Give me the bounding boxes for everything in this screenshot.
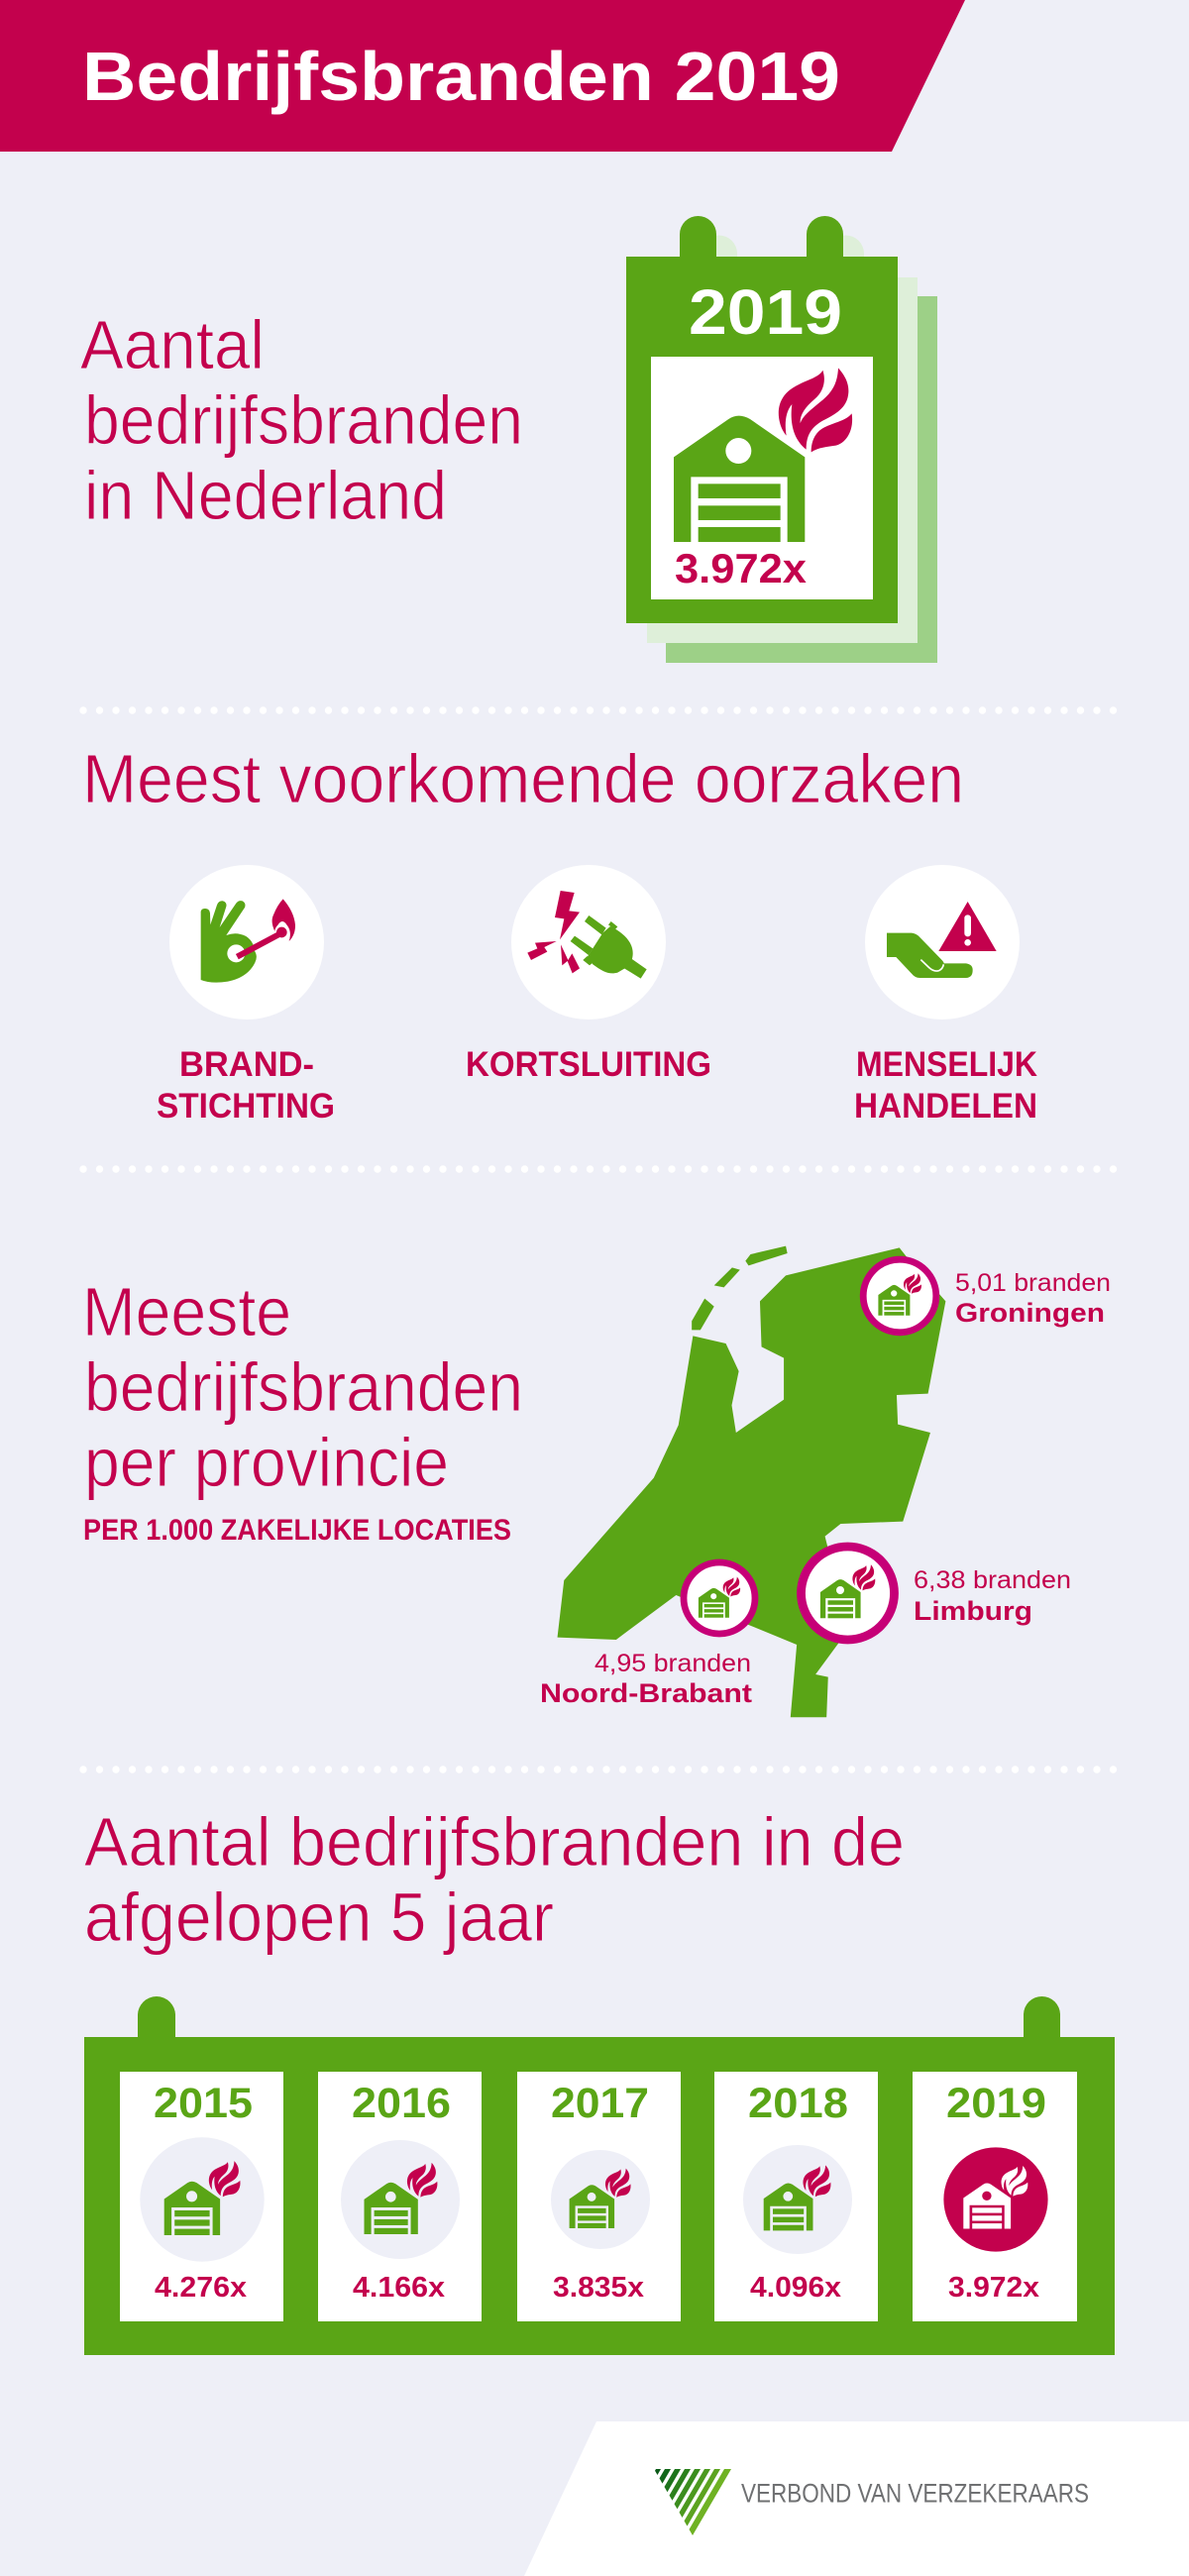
label: Limburg: Limburg bbox=[914, 1596, 1032, 1626]
icon: hand with warning triangle bbox=[887, 902, 997, 978]
card: 2017: 2017 bbox=[551, 2080, 649, 2127]
panel: five year calendar bbox=[84, 1996, 1115, 2355]
card: 2015: 4.276x bbox=[155, 2272, 247, 2304]
label: menselijk handelen: HANDELEN bbox=[854, 1087, 1037, 1126]
heading: meest voorkomende oorzaken: Meest voorkomende oorzaken bbox=[82, 740, 964, 817]
label: Limburg: 6,38 branden bbox=[914, 1566, 1071, 1594]
card: 2018: 4.096x bbox=[750, 2272, 841, 2304]
icon: burning building bbox=[674, 368, 852, 542]
marker: Groningen bbox=[863, 1259, 936, 1333]
heading: aantal bedrijfsbranden in Nederland: bedrijfsbranden bbox=[84, 381, 523, 459]
card: 2017 bbox=[517, 2072, 681, 2321]
heading: aantal bedrijfsbranden in Nederland bbox=[80, 306, 523, 534]
calendar: 2019 total bbox=[626, 216, 937, 663]
label: brandstichting: BRAND- bbox=[179, 1045, 314, 1084]
label: Limburg bbox=[914, 1566, 1071, 1626]
map of the Netherlands bbox=[558, 1246, 945, 1717]
card: 2017: 3.835x bbox=[553, 2272, 644, 2304]
calendar year: 2019 bbox=[689, 276, 842, 348]
card: 2018 bbox=[714, 2072, 878, 2321]
label: Noord-Brabant: 4,95 branden bbox=[594, 1650, 751, 1677]
card: 2015: 2015 bbox=[154, 2080, 253, 2127]
label: menselijk handelen bbox=[854, 1045, 1037, 1126]
label: Groningen: 5,01 branden bbox=[955, 1269, 1111, 1297]
heading: aantal bedrijfsbranden in de afgelopen 5 jaar bbox=[84, 1803, 905, 1956]
logo mark bbox=[655, 2469, 731, 2535]
heading: aantal bedrijfsbranden in Nederland: Aantal bbox=[80, 306, 265, 383]
card: 2016 bbox=[318, 2072, 482, 2321]
title: Bedrijfsbranden 2019 bbox=[82, 38, 840, 115]
heading: meeste bedrijfsbranden per provincie bbox=[82, 1273, 523, 1547]
label: brandstichting bbox=[157, 1045, 335, 1126]
marker: Noord-Brabant bbox=[684, 1562, 755, 1634]
label: brandstichting: STICHTING bbox=[157, 1087, 335, 1126]
card: 2016: 4.166x bbox=[353, 2272, 445, 2304]
cause: brandstichting bbox=[157, 865, 335, 1126]
subheading: PER 1.000 ZAKELIJKE LOCATIES bbox=[83, 1514, 511, 1547]
card: 2019: 2019 bbox=[946, 2080, 1046, 2127]
heading: aantal bedrijfsbranden in Nederland: in Nederland bbox=[84, 457, 447, 534]
label: Noord-Brabant: Noord-Brabant bbox=[540, 1678, 752, 1708]
card: 2015 bbox=[120, 2072, 283, 2321]
card: 2018: 2018 bbox=[748, 2080, 848, 2127]
label: kortsluiting: KORTSLUITING bbox=[466, 1045, 711, 1084]
header banner bbox=[0, 0, 965, 152]
heading: aantal bedrijfsbranden in de afgelopen 5 jaar: Aantal bedrijfsbranden in de bbox=[84, 1803, 905, 1880]
cause: kortsluiting bbox=[466, 865, 711, 1084]
heading: meeste bedrijfsbranden per provincie: per provincie bbox=[84, 1424, 449, 1501]
logo text: VERBOND VAN VERZEKERAARS bbox=[741, 2478, 1089, 2508]
heading: meeste bedrijfsbranden per provincie: bedrijfsbranden bbox=[84, 1348, 523, 1426]
label: Groningen bbox=[955, 1269, 1111, 1328]
footer panel bbox=[524, 2421, 1189, 2576]
card: 2019: 3.972x bbox=[948, 2272, 1039, 2304]
heading: meeste bedrijfsbranden per provincie: Meeste bbox=[82, 1273, 291, 1350]
marker: Limburg bbox=[801, 1547, 894, 1640]
heading: aantal bedrijfsbranden in de afgelopen 5 jaar: afgelopen 5 jaar bbox=[84, 1878, 554, 1956]
icon: plug with sparks bbox=[527, 891, 647, 979]
label: Noord-Brabant bbox=[540, 1650, 752, 1708]
label: Groningen: Groningen bbox=[955, 1298, 1105, 1328]
icon: hand with match bbox=[201, 899, 295, 983]
card: 2019 bbox=[913, 2072, 1077, 2321]
label: menselijk handelen: MENSELIJK bbox=[856, 1045, 1037, 1084]
card: 2016: 2016 bbox=[352, 2080, 451, 2127]
cause: menselijk handelen bbox=[854, 865, 1037, 1126]
calendar count: 3.972x bbox=[675, 545, 808, 591]
